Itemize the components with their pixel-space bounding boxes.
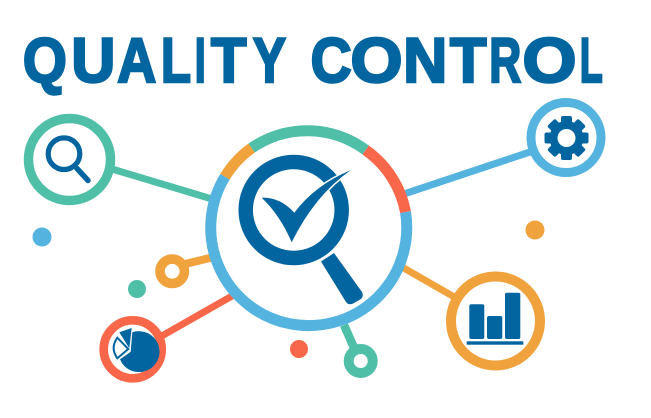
title: C bbox=[311, 26, 352, 96]
title: R bbox=[489, 26, 521, 96]
icon: bar chart bbox=[467, 293, 523, 345]
title: Y bbox=[253, 26, 285, 96]
title: T bbox=[450, 26, 486, 96]
central magnifier badge bbox=[210, 131, 407, 327]
title: I bbox=[195, 26, 206, 96]
connector: orange to small ring node bbox=[185, 257, 214, 264]
icon: magnifying glass bbox=[48, 138, 88, 180]
node: gear icon bbox=[531, 102, 601, 172]
connector: teal to search node bbox=[112, 169, 212, 199]
title: L bbox=[161, 26, 191, 96]
node: bar chart icon bbox=[451, 276, 540, 366]
dot: orange bbox=[526, 220, 544, 240]
title: A bbox=[117, 26, 156, 96]
dot: red bbox=[290, 340, 308, 358]
ring segment: orange bbox=[225, 148, 252, 177]
ring segment: red bbox=[366, 150, 406, 212]
dot: teal bbox=[128, 280, 146, 298]
small teal ring node bbox=[349, 349, 373, 373]
icon: gear bbox=[544, 116, 588, 160]
connector: red to pie chart node bbox=[160, 296, 232, 337]
magnifier handle bbox=[321, 253, 363, 304]
title: U bbox=[71, 26, 115, 96]
connector: blue to gear node bbox=[404, 152, 530, 194]
title: T bbox=[211, 26, 246, 96]
node: pie chart icon bbox=[104, 320, 162, 378]
small orange ring node bbox=[160, 259, 184, 283]
title: Q bbox=[23, 26, 67, 96]
dot: blue bbox=[32, 228, 52, 246]
node: search icon bbox=[28, 118, 110, 200]
ring segment: teal bbox=[252, 131, 366, 150]
connector: orange to bar chart node bbox=[402, 267, 456, 298]
title: N bbox=[403, 26, 447, 96]
magnifier lens bbox=[246, 162, 342, 258]
check mark bbox=[262, 170, 351, 242]
title: L bbox=[580, 26, 603, 96]
icon: pie chart bbox=[114, 328, 160, 372]
title: O bbox=[522, 26, 576, 96]
title: O bbox=[350, 26, 402, 96]
connector: teal to small ring node bbox=[344, 325, 355, 350]
ring segment: blue bbox=[211, 177, 407, 326]
